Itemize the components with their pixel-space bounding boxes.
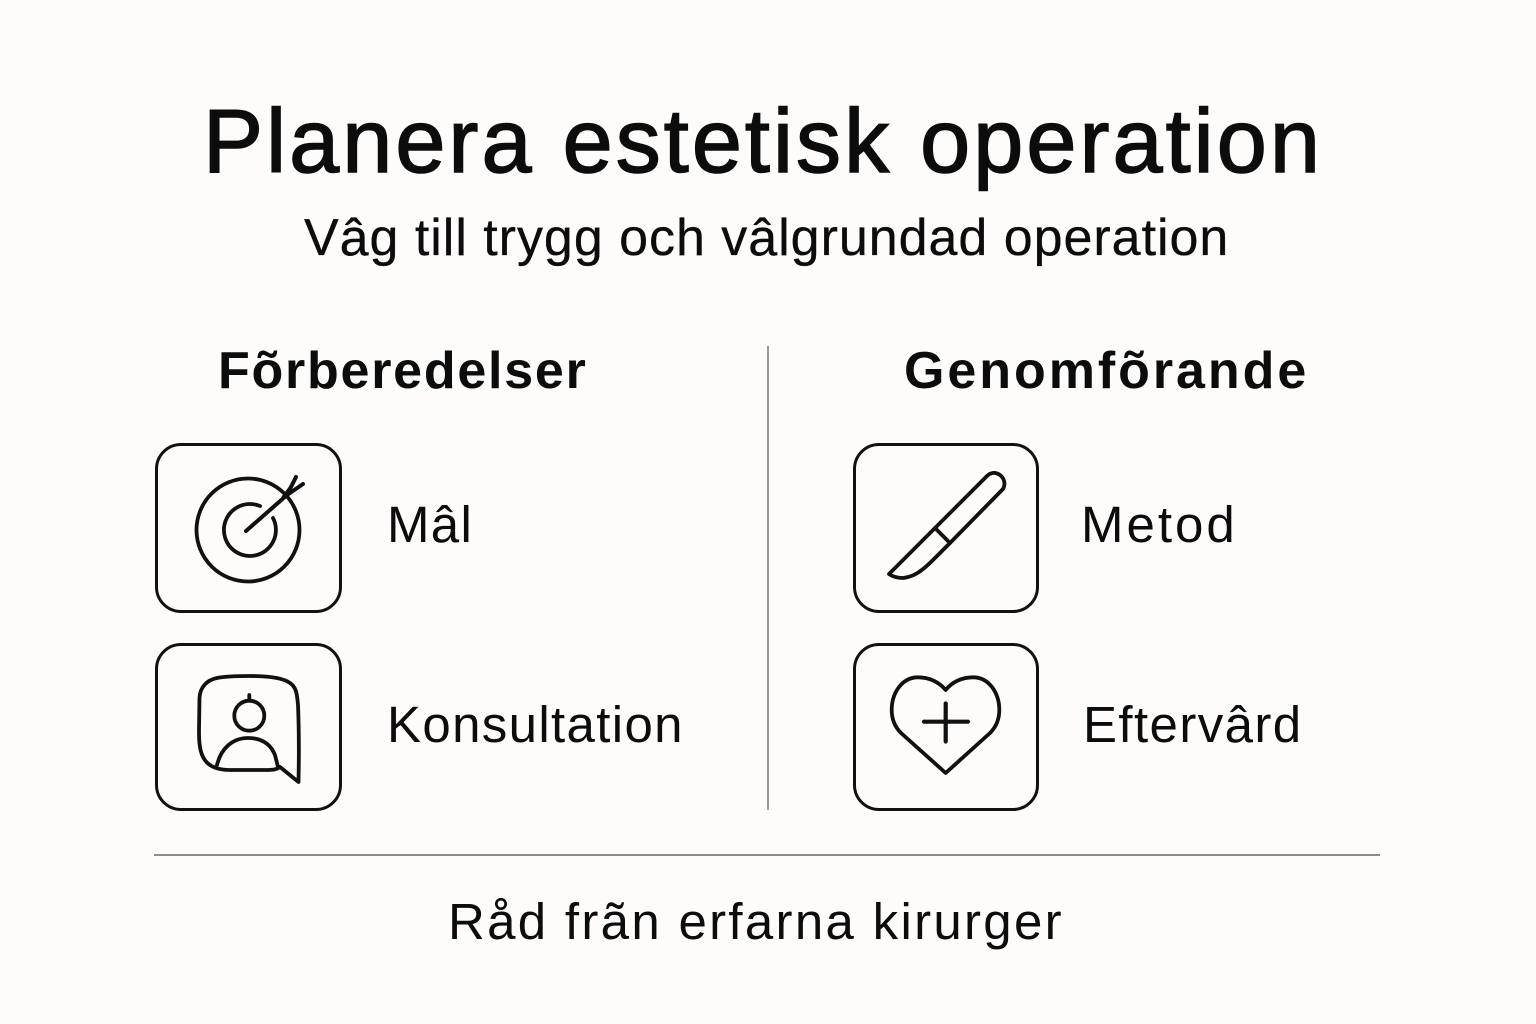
- icon: heart with plus: [853, 643, 1039, 811]
- subtitle: Vâg till trygg och vâlgrundad operation: [304, 209, 1229, 267]
- heading: execution: Genomfõrande: [904, 342, 1309, 400]
- label: aftercare: Eftervârd: [1083, 696, 1303, 753]
- icon: scalpel: [853, 443, 1039, 613]
- heading: preparations: Fõrberedelser: [218, 342, 588, 400]
- icon: consultation: [155, 643, 342, 811]
- icon: target: [155, 443, 342, 613]
- label: consultation: Konsultation: [387, 696, 684, 753]
- label: method: Metod: [1081, 496, 1238, 553]
- column divider: [767, 346, 768, 810]
- label: goal: Mâl: [387, 496, 473, 553]
- footer text: Råd frãn erfarna kirurger: [448, 893, 1064, 950]
- title: Planera estetisk operation: [203, 92, 1323, 192]
- footer divider: [154, 854, 1380, 856]
